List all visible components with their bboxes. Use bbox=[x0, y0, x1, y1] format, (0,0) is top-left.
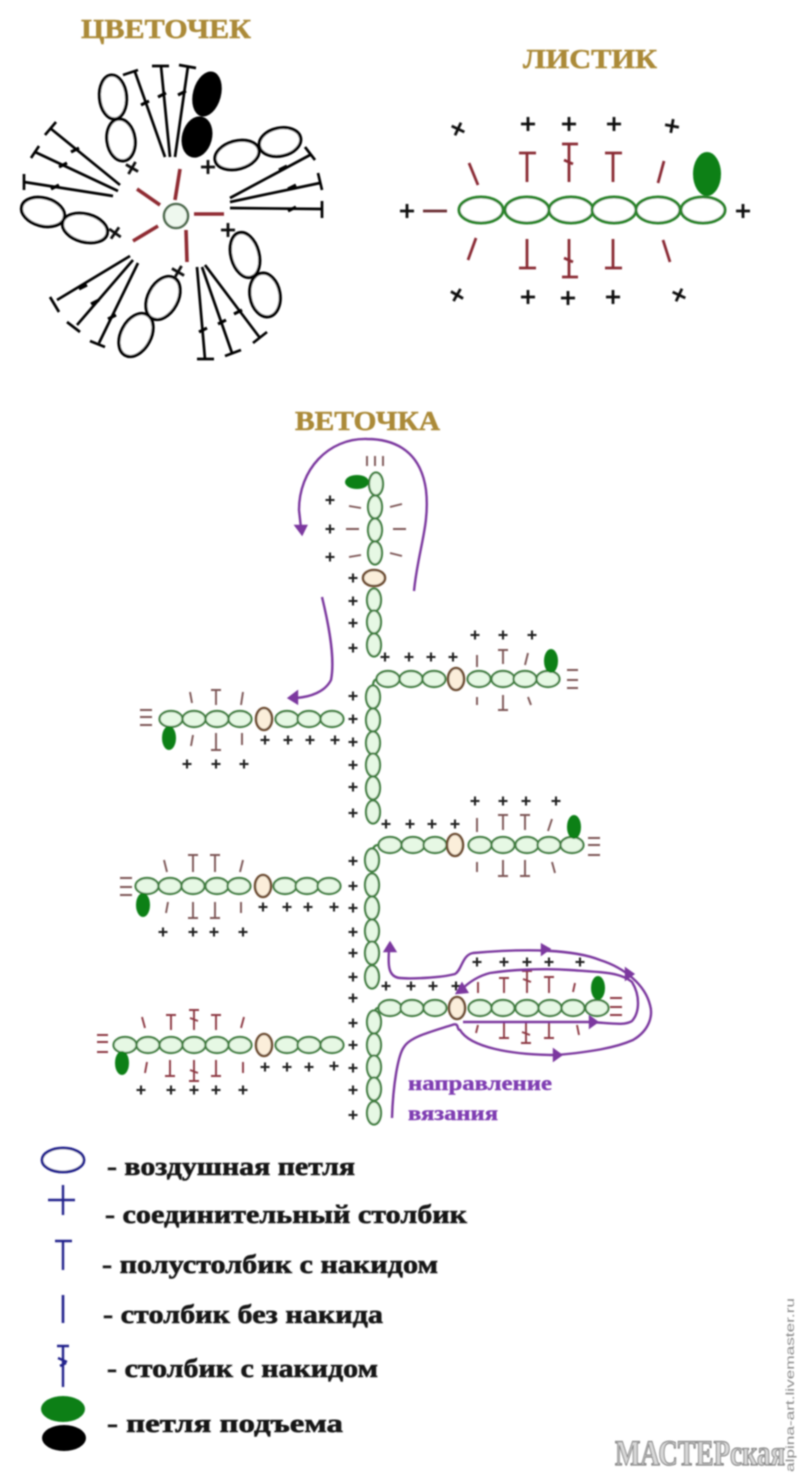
flower stitch ticks bbox=[51, 91, 296, 332]
branch chains: left bbox=[114, 708, 344, 1056]
flower stitches bbox=[24, 65, 322, 359]
legend row: double crochet bbox=[57, 1346, 378, 1387]
title: branch: ВЕТОЧКА bbox=[295, 406, 441, 436]
legend row: double crochet: - столбик с накидом bbox=[107, 1354, 378, 1383]
arrow: to left branch bbox=[289, 597, 332, 703]
flower black lifting loops bbox=[177, 68, 226, 161]
branch lifting loops bbox=[115, 475, 605, 1075]
legend row: turning loop: - петля подъема bbox=[107, 1409, 343, 1438]
legend row: slip stitch bbox=[48, 1185, 467, 1229]
legend row: single crochet: - столбик без накида bbox=[103, 1300, 383, 1329]
arrow: inner working loop bbox=[457, 969, 638, 1027]
title: flower: ЦВЕТОЧЕК bbox=[81, 14, 251, 44]
arrow: outer working loop bbox=[385, 943, 651, 1118]
legend row: slip stitch: - соединительный столбик bbox=[105, 1200, 467, 1229]
leaf lifting loop bbox=[693, 152, 721, 196]
flower chart bbox=[18, 65, 322, 362]
branch chains: right bbox=[376, 668, 608, 1019]
branch slip stitches bbox=[136, 496, 584, 1120]
legend bbox=[41, 1148, 467, 1451]
legend row: half double crochet bbox=[55, 1240, 438, 1279]
legend row: chain stitch: - воздушная петля bbox=[107, 1152, 355, 1181]
branch red stitches bbox=[97, 970, 622, 1081]
flower red spokes bbox=[133, 169, 224, 262]
leaf chart bbox=[400, 117, 750, 305]
legend row: chain stitch bbox=[42, 1148, 355, 1181]
label: knitting direction: вязания bbox=[408, 1101, 498, 1125]
watermark url: alpina-art.livemaster.ru bbox=[783, 1298, 797, 1472]
legend row: half double crochet: - полустолбик с накидом bbox=[102, 1250, 438, 1279]
flower chain loops bbox=[18, 74, 303, 362]
branch chart bbox=[97, 439, 651, 1124]
arrow: top loop bbox=[296, 439, 427, 591]
flower centre ring bbox=[164, 204, 188, 228]
label: knitting direction bbox=[408, 1071, 552, 1125]
label: knitting direction: направление bbox=[408, 1071, 552, 1095]
leaf dash bbox=[423, 210, 447, 212]
leaf chain bbox=[459, 197, 725, 223]
branch main stem chain bbox=[363, 472, 390, 1124]
legend row: turning loop bbox=[41, 1396, 343, 1451]
title: leaf: ЛИСТИК bbox=[523, 44, 657, 74]
leaf red stitches bbox=[468, 143, 670, 277]
flower slip stitches bbox=[105, 158, 235, 282]
leaf slip stitches bbox=[400, 117, 750, 305]
branch stitches bbox=[120, 456, 600, 918]
